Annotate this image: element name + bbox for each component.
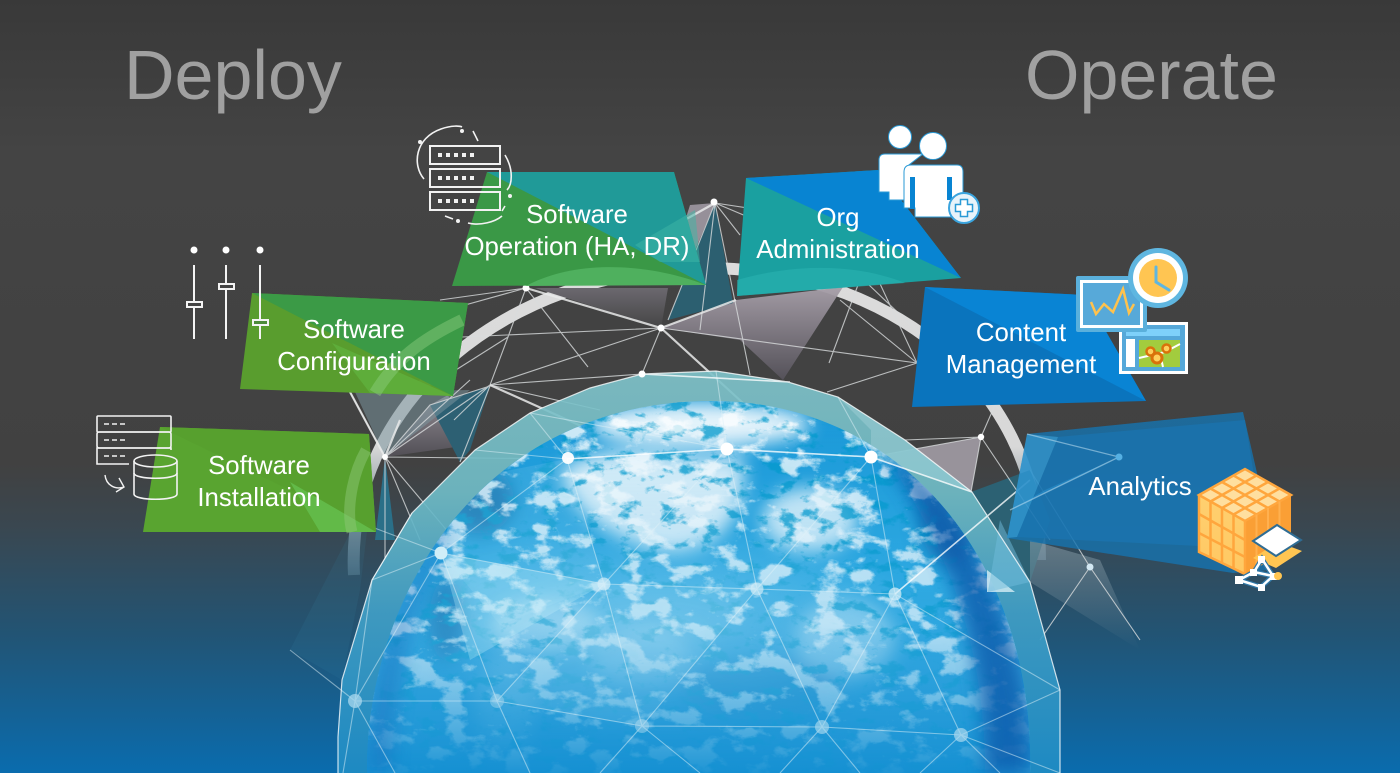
panel: Analytics: Analytics [1088,473,1192,501]
panel: Software Configuration [240,293,468,396]
back network lines [350,203,1140,640]
icon: configuration sliders [187,246,268,339]
globe shell [338,371,1060,773]
icon: analytics cube [1199,469,1302,591]
panel: Org Administration [737,170,961,296]
panel: Software Installation: Installation [197,484,321,512]
panel: Software Configuration: Configuration [277,348,431,376]
panel: Content Management [912,287,1146,407]
icon: users with plus [879,126,979,223]
back network facets [290,203,1140,680]
panel: Analytics [1007,412,1270,573]
panel: Content Management: Content [976,319,1066,347]
panel: Software Operation [452,172,706,286]
icon: servers and database [97,416,177,499]
earth globe [360,400,1040,773]
heading: Operate: Operate [1025,36,1278,114]
orbit ring [354,268,1040,575]
panel: Software Configuration: Software [303,316,405,344]
panel: Software Operation: Software [526,201,628,229]
panel: Org Administration: Administration [756,236,920,264]
panel: Software Installation [143,427,376,532]
network nodes [348,198,1094,742]
panel: Content Management: Management [946,351,1096,379]
panel: Software Installation: Software [208,452,310,480]
icon: server cluster with circular arrows [417,126,512,224]
panel: Org Administration: Org [816,204,860,232]
icon: content map, chart and clock [1076,248,1188,374]
heading: Deploy: Deploy [124,36,342,114]
shell top right facet highlights [838,397,1030,592]
front network lines [290,371,1060,773]
panel: Software Operation: Operation (HA, DR) [464,233,690,261]
